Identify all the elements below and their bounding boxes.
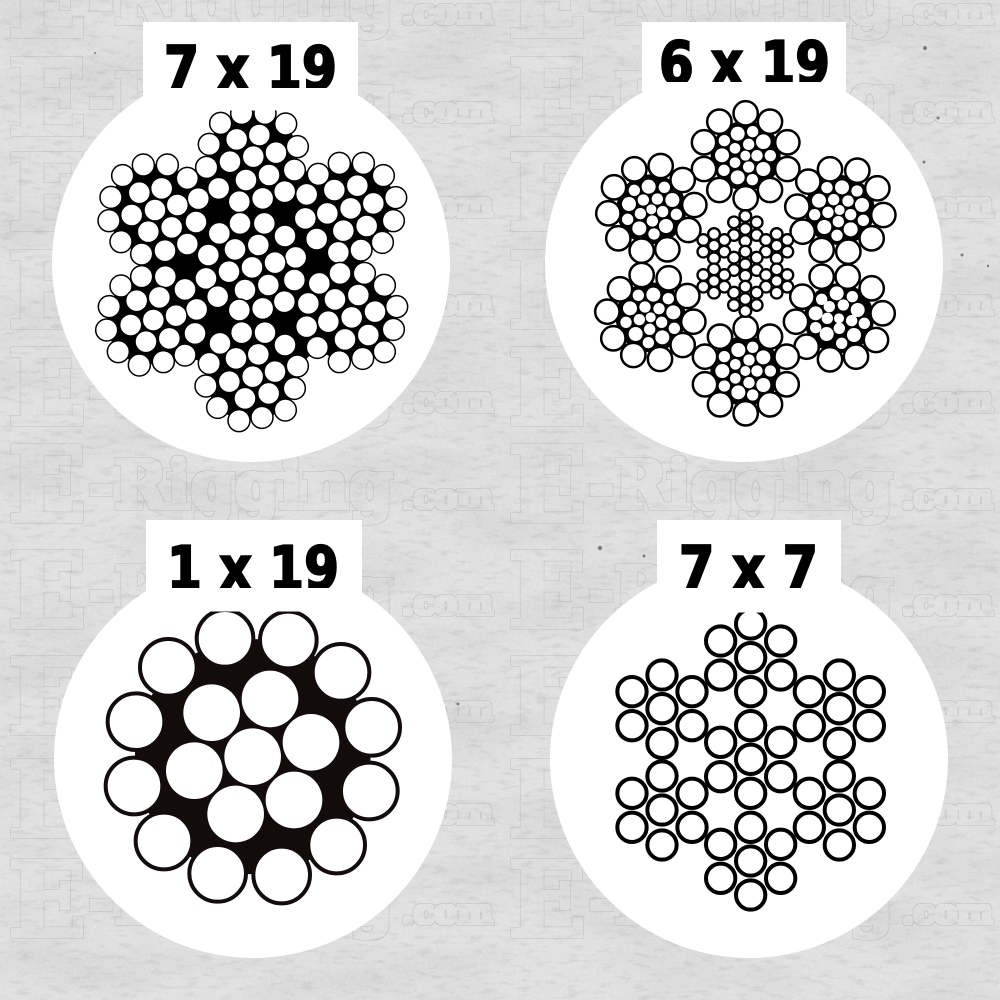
watermark: repeated E-Rigging.com wordmark: -Rigging [88,761,393,839]
watermark: repeated E-Rigging.com wordmark: E [8,531,87,652]
watermark: repeated E-Rigging.com wordmark: E [508,531,587,652]
heading: 6 x 19: 6 x 19 [659,29,830,99]
watermark: repeated E-Rigging.com wordmark: .com [902,283,993,322]
watermark: repeated E-Rigging.com wordmark: .com [402,892,493,931]
watermark: repeated E-Rigging.com wordmark: .com [902,380,993,419]
heading: 7 x 19: 7 x 19 [164,34,337,104]
watermark: repeated E-Rigging.com wordmark: .com [902,90,993,129]
watermark: repeated E-Rigging.com wordmark: .com [402,583,493,622]
diagram: 6 x 19 rope cross-section [595,101,895,425]
watermark: repeated E-Rigging.com wordmark: .com [402,380,493,419]
diagram: 7 x 7 rope cross-section [617,609,884,910]
watermark: repeated E-Rigging.com wordmark: -Rigging [588,861,893,939]
watermark: repeated E-Rigging.com wordmark: .com [402,477,493,516]
heading: 1 x 19: 1 x 19 [167,534,339,604]
panel: 7 x 7 [550,520,948,958]
watermark: repeated E-Rigging.com wordmark: -Rigging [588,349,893,427]
watermark: repeated E-Rigging.com wordmark: -Rigging [588,154,893,232]
panel: 6 x 19 [545,22,943,462]
watermark: repeated E-Rigging.com wordmark: E [508,840,587,961]
watermark: repeated E-Rigging.com wordmark: .com [902,477,993,516]
watermark: repeated E-Rigging.com wordmark: E [508,38,587,159]
watermark: repeated E-Rigging.com wordmark: E [508,133,587,254]
panel: 1 x 19 [54,520,452,958]
watermark: repeated E-Rigging.com wordmark: .com [402,792,493,831]
watermark: repeated E-Rigging.com wordmark: -Rigging [588,658,893,736]
watermark: repeated E-Rigging.com wordmark: .com [402,283,493,322]
watermark: repeated E-Rigging.com wordmark: -Rigging [88,552,393,630]
disc and label tab [545,22,943,462]
watermark: repeated E-Rigging.com wordmark: E [8,231,87,352]
watermark: repeated E-Rigging.com wordmark: -Rigging [588,552,893,630]
watermark: repeated E-Rigging.com wordmark: .com [902,892,993,931]
watermark: repeated E-Rigging.com wordmark: .com [902,689,993,728]
watermark: repeated E-Rigging.com wordmark: E [508,740,587,861]
watermark: repeated E-Rigging.com wordmark: E [508,328,587,449]
watermark: repeated E-Rigging.com wordmark: .com [902,583,993,622]
watermark: repeated E-Rigging.com wordmark: E [8,425,87,546]
diagram: 1 x 19 strand cross-section [106,610,400,903]
panel: 7 x 19 [52,22,450,462]
watermark: repeated E-Rigging.com wordmark: -Rigging [88,154,393,232]
watermark: repeated E-Rigging.com wordmark: E [8,133,87,254]
watermark: repeated E-Rigging.com wordmark: .com [902,792,993,831]
watermark: repeated E-Rigging.com wordmark: -Rigging [88,59,393,137]
disc and label tab [550,520,948,958]
watermark: repeated E-Rigging.com wordmark: E [8,740,87,861]
watermark: repeated E-Rigging.com wordmark: -Rigging [88,446,393,524]
watermark: repeated E-Rigging.com wordmark: E [8,38,87,159]
watermark: repeated E-Rigging.com wordmark: -Rigging [588,446,893,524]
watermark: repeated E-Rigging.com wordmark: -Rigging [88,658,393,736]
watermark: repeated E-Rigging.com wordmark: E [508,231,587,352]
watermark: repeated E-Rigging.com wordmark: .com [902,185,993,224]
watermark: repeated E-Rigging.com wordmark: E [508,425,587,546]
watermark: repeated E-Rigging.com wordmark: .com [402,185,493,224]
watermark: repeated E-Rigging.com wordmark: .com [402,689,493,728]
disc and label tab [54,520,452,958]
disc and label tab [52,22,450,462]
watermark: repeated E-Rigging.com wordmark: E [8,328,87,449]
watermark: repeated E-Rigging.com wordmark: -Rigging [88,861,393,939]
watermark: repeated E-Rigging.com wordmark: .com [402,90,493,129]
watermark: repeated E-Rigging.com wordmark: -Rigging [88,252,393,330]
watermark: repeated E-Rigging.com wordmark: -Rigging [588,59,893,137]
diagram: 7 x 19 rope cross-section [96,102,408,432]
watermark: repeated E-Rigging.com wordmark: E [508,637,587,758]
watermark: repeated E-Rigging.com wordmark: -Rigging [88,349,393,427]
watermark: repeated E-Rigging.com wordmark: -Rigging [588,252,893,330]
watermark: repeated E-Rigging.com wordmark: E [8,840,87,961]
watermark: repeated E-Rigging.com wordmark: -Rigging [588,761,893,839]
heading: 7 x 7: 7 x 7 [679,534,818,604]
watermark: repeated E-Rigging.com wordmark: E [8,637,87,758]
